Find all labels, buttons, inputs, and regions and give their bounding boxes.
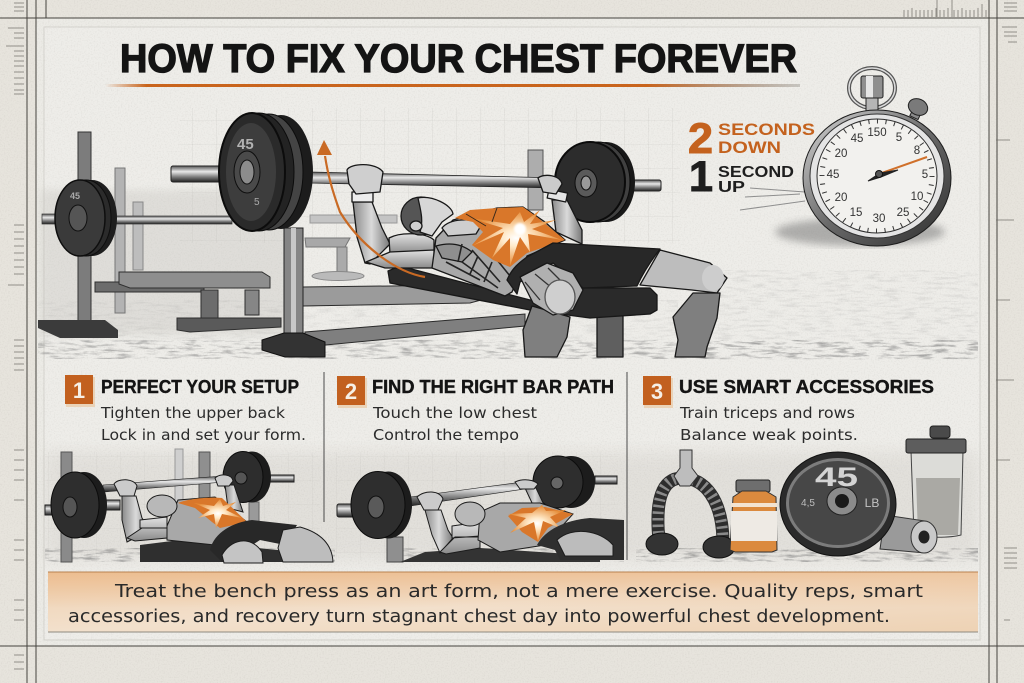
icon: weight plate: LB [865,496,879,510]
icon: weight plate: 4,5 [801,498,815,509]
two seconds down: 2 [688,115,713,163]
front rack and rails [262,228,525,357]
muscle definition [436,220,510,288]
dial numbers: 5 [896,132,902,144]
one second up: SECOND [718,164,794,181]
sketched gym grid background [38,108,978,360]
back rack and bench [38,132,543,338]
badge 3 [643,376,673,408]
footer callout: accessories, and recovery turn stagnant chest day into powerful chest development. [68,606,890,627]
step 1 text: Tighten the upper back [100,404,285,422]
dial numbers: 150 [867,127,887,139]
arms [347,165,582,268]
step 3 text: Balance weak points. [680,426,858,444]
far leg [640,250,727,293]
footer callout [48,572,978,632]
footer callout: Treat the bench press as an art form, not a mere exercise. Quality reps, smart [114,581,923,602]
one second up [689,153,794,201]
icon: rope handle [646,450,735,558]
dial numbers: 30 [873,213,885,225]
main illustration: bench press [38,108,978,360]
dial numbers: 20 [835,148,847,160]
near leg [523,306,570,357]
step 2 text [372,404,537,444]
dial numbers [827,127,928,225]
badge 3: 3 [651,379,663,404]
step 2 text: Control the tempo [373,426,519,444]
one second up: UP [718,179,745,196]
shorts [507,243,660,294]
bar path arrow [317,140,425,277]
barbell with plates: 5 [254,197,260,208]
badge 1: 1 [73,378,85,403]
step 2 panel [324,372,624,562]
dial numbers: 45 [851,133,863,145]
dial numbers: 20 [835,192,847,204]
crown ring and stem [849,68,930,120]
step 3 panel [627,372,978,562]
icon: weight plate: 45 [815,462,858,492]
athlete [347,165,727,357]
dial numbers: 25 [897,207,909,219]
icon: foam roller [880,515,937,553]
dial numbers: 15 [850,207,862,219]
two seconds down: SECONDS [718,121,815,139]
step 1 illustration [45,449,335,563]
step 1 text: Lock in and set your form. [101,426,306,444]
step 3 heading: USE SMART ACCESSORIES [679,377,934,397]
left background barbell [42,180,232,256]
icon: weight plate [780,452,896,556]
dial numbers: 10 [911,191,923,203]
tempo text [688,115,815,201]
two seconds down [688,115,815,163]
hands [868,157,927,181]
barbell with plates [171,113,661,231]
barbell with plates: 45 [237,136,254,153]
dial face [817,119,937,233]
dial numbers: 45 [827,169,839,181]
bench pad and leg [388,266,657,357]
step 1 text [100,404,306,444]
title: HOW TO FIX YOUR CHEST FOREVER [120,37,797,81]
case [803,110,951,246]
icon: shaker bottle [906,426,966,537]
left background barbell: 45 [70,191,80,201]
step 3 text [679,404,858,444]
dial numbers: 5 [922,169,928,181]
step 2 heading: FIND THE RIGHT BAR PATH [372,377,614,397]
step 2 text: Touch the low chest [372,404,537,422]
two seconds down: DOWN [718,139,781,157]
torso [432,207,565,296]
badge 2 [337,376,367,408]
step 1 panel [45,375,335,563]
badge 2: 2 [345,379,357,404]
badge 1 [65,375,95,407]
icon: supplement jar [730,480,777,552]
step 1 heading: PERFECT YOUR SETUP [101,377,299,397]
dial numbers: 8 [914,145,920,157]
step 2 illustration [336,452,624,562]
chest burst [466,208,562,266]
one second up: 1 [689,153,713,201]
head [401,197,453,236]
step 3 text: Train triceps and rows [679,404,855,422]
stopwatch [740,68,951,246]
orange chest [455,207,565,267]
